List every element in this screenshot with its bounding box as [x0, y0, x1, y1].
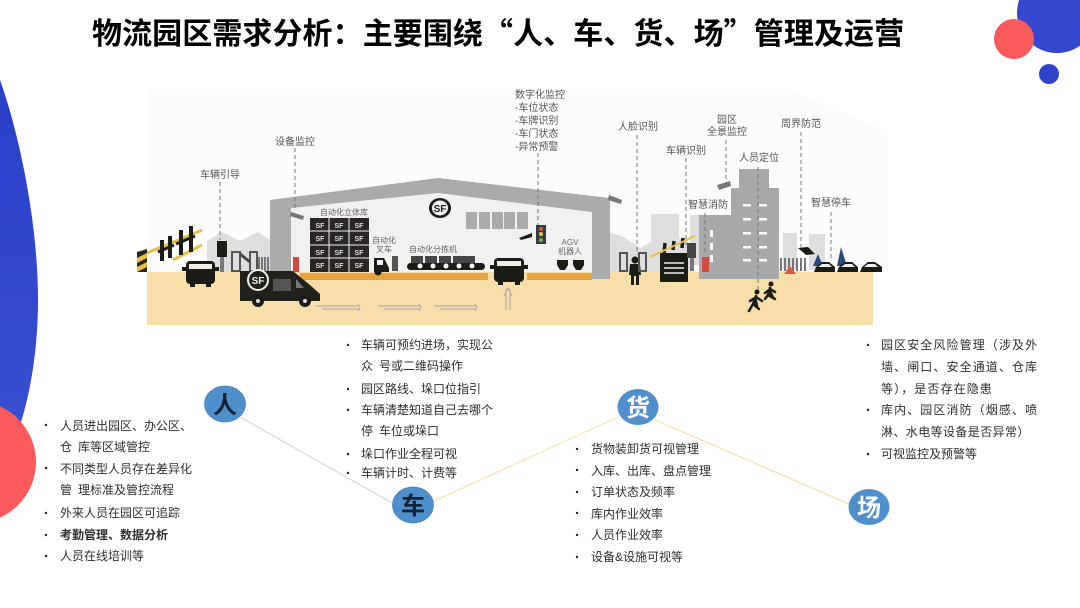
text block: 场 requirements: [867, 337, 1038, 461]
automated storage rack: SF: [355, 223, 364, 230]
warehouse labels: 自动化立体库: [320, 207, 368, 217]
warehouse labels: 叉车: [376, 244, 392, 254]
running people: [749, 282, 775, 311]
text block: 人 requirements: 人员在线培训等: [60, 548, 144, 563]
text block: 人 requirements: 仓 库等区域管控: [60, 439, 150, 454]
callout: digital monitoring: -车门状态: [515, 127, 558, 140]
fire hydrants: [293, 257, 709, 272]
text block: 场 requirements: 库内、园区消防（烟感、喷: [881, 402, 1038, 417]
text block: 车 requirements: 众 号或二维码操作: [361, 358, 463, 373]
sorting conveyor: [407, 256, 485, 270]
warehouse SF logo: SF: [434, 204, 446, 215]
text block: 人 requirements: 不同类型人员存在差异化: [60, 462, 192, 476]
callout: vehicle recognition: 车辆识别: [666, 144, 706, 157]
decoration: left blue arc: [0, 80, 38, 470]
text block: 车 requirements: 车辆清楚知道自己去哪个: [361, 402, 493, 417]
warehouse SF logo: [429, 198, 451, 218]
text block: 车 requirements: 垛口作业全程可视: [361, 446, 457, 461]
text block: 货 requirements: 货物装卸货可视管理: [591, 441, 699, 456]
text block: 货 requirements: 订单状态及频率: [591, 484, 675, 499]
node: 场: 场: [857, 495, 881, 522]
automated storage rack: SF: [355, 236, 364, 243]
automated storage rack: SF: [335, 250, 344, 257]
title: 物流园区需求分析：主要围绕“人、车、货、场”管理及运营: [92, 9, 904, 53]
callout: digital monitoring: -车位状态: [515, 101, 558, 114]
connector: 人 to 车: [240, 417, 394, 504]
vehicle guidance terminal and turnstile: [217, 241, 268, 272]
text block: 货 requirements: 设备&设施可视等: [591, 549, 683, 564]
text block: 场 requirements: 淋、水电等设备是否异常）: [881, 425, 1030, 439]
barrier gate: [137, 226, 202, 272]
decoration: left red circle: [0, 401, 36, 523]
text block: 货 requirements: 人员作业效率: [591, 527, 663, 542]
node: 货: [618, 389, 658, 425]
callout: smart parking: 智慧停车: [811, 196, 851, 209]
node: 人: 人: [213, 392, 237, 419]
warehouse: [270, 178, 610, 280]
callout: digital monitoring: [515, 88, 565, 153]
decoration: top right circles: [994, 0, 1080, 84]
SF van: SF: [252, 276, 264, 287]
traffic light: [536, 225, 546, 244]
text block: 场 requirements: 等），是否存在隐患: [881, 382, 993, 396]
warehouse labels: 机器人: [558, 246, 582, 256]
node: 场: [848, 489, 890, 525]
text block: 人 requirements: 管 理标准及管控流程: [60, 482, 174, 497]
warehouse labels: [320, 207, 582, 256]
text block: 人 requirements: 人员进出园区、办公区、: [60, 418, 192, 433]
automated storage rack: SF: [335, 236, 344, 243]
callout: digital monitoring: -车牌识别: [515, 114, 558, 127]
text block: 货 requirements: 库内作业效率: [591, 506, 663, 521]
callout: personnel positioning: 人员定位: [739, 151, 779, 164]
automated storage rack: SF: [316, 263, 325, 270]
text block: 人 requirements: 外来人员在园区可追踪: [60, 505, 180, 520]
automated storage rack: SF: [316, 223, 325, 230]
automated storage rack: SF: [316, 236, 325, 243]
text block: 场 requirements: 园区安全风险管理（涉及外: [881, 337, 1038, 352]
callout: smart fire protection: 智慧消防: [688, 198, 728, 211]
callout: perimeter defence: 周界防范: [781, 117, 821, 130]
automated storage rack: SF: [355, 250, 364, 257]
warehouse windows: [466, 212, 528, 229]
text block: 车 requirements: 园区路线、垛口位指引: [361, 381, 481, 396]
illustration: logistics park scene: [137, 88, 888, 325]
callout: vehicle guidance: 车辆引导: [200, 168, 240, 181]
text block: 货 requirements: [576, 441, 711, 564]
callout: park panoramic monitoring: 全景监控: [707, 125, 747, 138]
text block: 场 requirements: 墙、闸口、安全通道、仓库: [881, 359, 1038, 374]
node: 车: 车: [401, 493, 425, 520]
callout: park panoramic monitoring: 园区: [717, 114, 737, 126]
callout: face recognition: 人脸识别: [618, 120, 658, 133]
warehouse labels: 自动化: [372, 235, 396, 245]
text block: 车 requirements: [347, 337, 493, 480]
warehouse labels: AGV: [562, 238, 579, 247]
SF van: [240, 270, 320, 307]
right building: [699, 169, 779, 279]
trees: [813, 247, 847, 266]
node: 货: 货: [626, 395, 650, 422]
bus icon right with barrier: [650, 236, 696, 282]
text block: 场 requirements: 可视监控及预警等: [881, 446, 977, 461]
text block: 货 requirements: 入库、出库、盘点管理: [591, 463, 711, 478]
building windows: [710, 204, 767, 262]
security cameras: [290, 181, 731, 240]
gate panels: [620, 253, 646, 271]
bus icon left: [182, 261, 219, 287]
callout dashed lines: [220, 132, 831, 290]
callout: park panoramic monitoring: [707, 114, 747, 138]
connector: 货 to 场: [655, 420, 849, 504]
ground: [147, 272, 873, 325]
text block: 人 requirements: 考勤管理、数据分析: [60, 527, 168, 542]
warehouse labels: 自动化分拣机: [409, 244, 457, 254]
text block: 车 requirements: 停 车位或垛口: [361, 423, 439, 438]
node: 人: [204, 386, 246, 422]
automated storage rack: SF: [335, 263, 344, 270]
AGV robots: [557, 260, 584, 270]
text block: 车 requirements: 车辆计时、计费等: [361, 465, 457, 480]
automated storage rack: SF: [335, 223, 344, 230]
automated storage rack: SF: [316, 250, 325, 257]
forklift: [374, 256, 398, 276]
security guard: [629, 256, 641, 285]
callout: digital monitoring: 数字化监控: [515, 88, 565, 101]
automated storage rack: SF: [355, 263, 364, 270]
connector: 车 to 货: [432, 417, 618, 502]
parked cars: [814, 262, 882, 272]
perimeter fence and alarm: [781, 247, 815, 274]
background buildings: [207, 214, 825, 272]
automated storage rack: [310, 218, 369, 272]
callout: equipment monitoring: 设备监控: [275, 135, 315, 148]
scene background: [147, 90, 888, 272]
callout: digital monitoring: -异常预警: [515, 140, 558, 153]
bus icon center: [490, 258, 528, 285]
road arrows: [316, 288, 512, 311]
text block: 人 requirements: [45, 418, 192, 563]
node: 车: [392, 487, 434, 523]
text block: 车 requirements: 车辆可预约进场，实现公: [361, 337, 493, 352]
